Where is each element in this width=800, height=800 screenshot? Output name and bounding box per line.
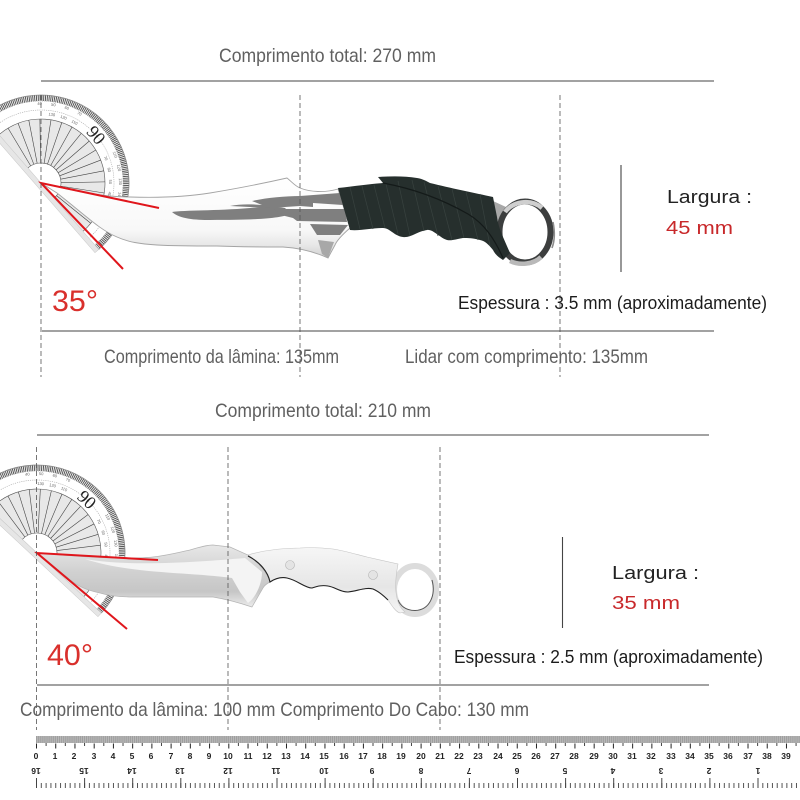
protractor: upper knife: 120 <box>116 164 122 172</box>
protractor: lower knife: 50 <box>39 471 44 476</box>
angle: 35 degrees: 35° <box>52 285 98 318</box>
title: upper total length: Comprimento total: 270 mm <box>219 45 436 67</box>
label: upper thickness: Espessura : 3.5 mm (aproximadamente) <box>458 293 767 313</box>
ruler: centimetre numbers: 38 <box>762 751 772 761</box>
ruler: centimetre numbers: 18 <box>377 751 387 761</box>
protractor: upper knife: 60 <box>106 167 112 173</box>
ruler <box>31 736 800 786</box>
ruler: centimetre numbers: 13 <box>281 751 291 761</box>
protractor: lower knife: 110 <box>104 513 112 522</box>
ruler: inch numbers (upside down): 12 <box>223 766 233 776</box>
ruler: centimetre numbers: 22 <box>454 751 464 761</box>
protractor label: 90: 90 <box>73 486 100 513</box>
ruler: centimetre numbers: 36 <box>723 751 733 761</box>
ruler: centimetre numbers: 27 <box>550 751 560 761</box>
protractor: lower knife: 120 <box>49 482 57 489</box>
protractor: upper knife: 50 <box>51 102 57 107</box>
protractor: upper knife: 70 <box>103 155 109 162</box>
ruler: centimetre numbers: 4 <box>111 751 116 761</box>
ruler: inch numbers (upside down): 7 <box>466 766 471 776</box>
ruler: centimetre numbers: 29 <box>589 751 599 761</box>
protractor: upper knife: 110 <box>112 151 119 159</box>
handle wrap <box>338 176 510 260</box>
label: upper width: Largura : <box>667 187 752 207</box>
ruler: centimetre numbers: 16 <box>339 751 349 761</box>
protractor: upper knife: 50 <box>108 180 113 185</box>
ruler: centimetre numbers: 0 <box>34 751 39 761</box>
ruler: centimetre numbers: 28 <box>569 751 579 761</box>
angle: 40 degrees: 40° <box>47 639 93 672</box>
blade <box>41 178 350 258</box>
protractor: lower knife: 120 <box>110 526 117 534</box>
ruler: centimetre numbers: 30 <box>608 751 618 761</box>
ruler: centimetre numbers: 20 <box>416 751 426 761</box>
ruler: inch numbers (upside down): 8 <box>418 766 423 776</box>
ruler: centimetre numbers: 37 <box>743 751 753 761</box>
ruler: centimetre numbers: 1 <box>53 751 58 761</box>
ruler: centimetre numbers: 2 <box>72 751 77 761</box>
handle wrap flap edge <box>383 183 503 258</box>
protractor: upper knife: 130 <box>118 178 123 186</box>
handle wrap lines <box>350 180 490 246</box>
blade <box>38 545 270 607</box>
ruler: centimetre numbers: 11 <box>244 751 253 761</box>
protractor: lower knife: 130 <box>113 540 119 548</box>
dimension lines <box>37 81 714 685</box>
value: 45 mm: 45 mm <box>666 218 733 238</box>
ruler: centimetre numbers: 7 <box>169 751 174 761</box>
ruler: centimetre numbers: 14 <box>300 751 310 761</box>
ruler: centimetre numbers: 32 <box>646 751 656 761</box>
ruler: centimetre numbers: 6 <box>149 751 154 761</box>
blade highlight <box>85 558 262 603</box>
protractor: upper knife: 60 <box>64 105 71 111</box>
handle rivets <box>286 560 378 580</box>
value: 35 mm: 35 mm <box>612 593 680 613</box>
ruler: inch ticks <box>36 783 800 786</box>
protractor: upper knife: 120 <box>60 114 68 121</box>
lower knife <box>38 545 436 614</box>
title: lower total length: Comprimento total: 210 mm <box>215 400 431 422</box>
ruler: centimetre numbers <box>34 751 791 761</box>
ruler: centimetre numbers: 24 <box>493 751 503 761</box>
ruler: centimetre numbers: 21 <box>435 751 445 761</box>
red angle lines: upper <box>41 183 159 269</box>
ruler: inch numbers (upside down): 1 <box>755 766 760 776</box>
protractor: lower knife: 70 <box>96 518 103 525</box>
label: upper handle length: Lidar com comprimento: 135mm <box>405 346 648 368</box>
ruler: centimetre numbers: 31 <box>627 751 637 761</box>
ruler: inch numbers (upside down): 4 <box>610 766 615 776</box>
protractor: lower knife: 60 <box>100 530 107 536</box>
protractor: lower knife: 40 <box>104 554 109 560</box>
ruler: centimetre numbers: 10 <box>223 751 233 761</box>
protractor: upper knife <box>0 50 165 253</box>
ruler: inch numbers (upside down): 2 <box>706 766 711 776</box>
ruler: centimetre numbers: 23 <box>473 751 483 761</box>
protractor: lower knife: 60 <box>52 473 58 479</box>
protractor: upper knife: 140 <box>116 192 123 200</box>
ruler: inch numbers (upside down): 10 <box>319 766 329 776</box>
ruler: centimetre numbers: 5 <box>130 751 135 761</box>
ruler: centimetre numbers: 19 <box>396 751 406 761</box>
red angle lines: lower <box>37 553 158 629</box>
protractor: lower knife: 50 <box>103 542 109 548</box>
protractor: lower knife: 40 <box>25 471 31 477</box>
protractor: upper knife: 110 <box>71 118 79 126</box>
protractor: upper knife: 130 <box>48 111 56 117</box>
dashed guides <box>36 95 560 730</box>
ruler: inch numbers (upside down): 5 <box>562 766 567 776</box>
blade flame pattern <box>172 193 348 258</box>
ruler: centimetre numbers: 34 <box>685 751 695 761</box>
ruler: centimetre numbers: 39 <box>781 751 791 761</box>
protractor: upper knife: 40 <box>107 191 112 197</box>
ruler: inch numbers (upside down): 9 <box>369 766 374 776</box>
protractor: lower knife: 130 <box>37 481 45 486</box>
ruler: inch numbers (upside down): 16 <box>31 766 41 776</box>
ruler: inch numbers (upside down): 11 <box>271 766 280 776</box>
upper knife <box>41 176 554 264</box>
label: lower blade and handle length: Comprimento da lâmina: 100 mm Comprimento Do Cabo: 130 mm <box>20 699 529 721</box>
label: upper blade length: Comprimento da lâmina: 135mm <box>104 346 339 368</box>
handle <box>248 548 405 613</box>
ruler: centimetre numbers: 35 <box>704 751 714 761</box>
ruler: centimetre numbers: 26 <box>531 751 541 761</box>
ruler: centimetre numbers: 33 <box>666 751 676 761</box>
protractor: lower knife: 140 <box>114 554 119 561</box>
ruler: inch numbers (upside down): 3 <box>658 766 663 776</box>
ruler: centimetre numbers: 15 <box>319 751 329 761</box>
protractor: lower knife <box>0 420 161 617</box>
knife ring <box>394 566 436 614</box>
label: lower width: Largura : <box>612 563 699 583</box>
protractor: lower knife: 30 <box>102 566 108 572</box>
ruler: centimetre numbers: 8 <box>188 751 193 761</box>
protractor: lower knife: 110 <box>60 485 69 493</box>
protractor: upper knife: 30 <box>103 203 110 209</box>
ruler: centimetre numbers: 17 <box>358 751 368 761</box>
ruler: inch numbers (upside down): 6 <box>514 766 519 776</box>
ruler: inch numbers (upside down): 14 <box>127 766 137 776</box>
protractor: upper knife: 70 <box>76 110 83 117</box>
knife ring <box>490 201 554 264</box>
label: lower thickness: Espessura : 2.5 mm (aproximadamente) <box>454 647 763 667</box>
ruler: inch numbers (upside down): 13 <box>175 766 185 776</box>
ruler: centimetre numbers: 25 <box>512 751 522 761</box>
protractor: upper knife: 40 <box>37 101 43 106</box>
ruler: millimetre bar <box>36 736 800 746</box>
ruler: inch numbers (upside down) <box>31 766 760 776</box>
ruler: centimetre numbers: 9 <box>207 751 212 761</box>
handle bottom edge shadow <box>248 556 388 600</box>
protractor: lower knife: 70 <box>65 477 72 483</box>
protractor label: 90: 90 <box>83 122 110 148</box>
ruler: inch numbers (upside down): 15 <box>79 766 89 776</box>
ruler: centimetre numbers: 12 <box>262 751 272 761</box>
ruler: centimetre numbers: 3 <box>92 751 97 761</box>
